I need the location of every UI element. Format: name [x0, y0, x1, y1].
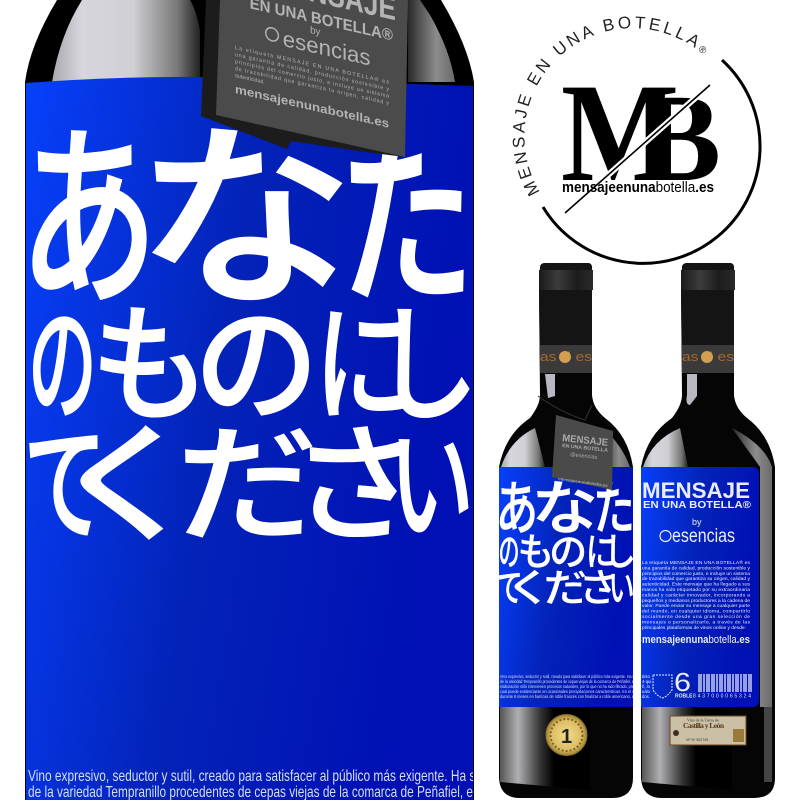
front label slogan: く — [506, 568, 552, 611]
front bottle — [496, 263, 636, 798]
back label title: EN UNA BOTELLA® — [643, 499, 751, 511]
large label slogan: の — [194, 295, 319, 438]
back label paragraph: pequeños y medianos productores a la cadena de — [642, 598, 750, 604]
large label slogan: い — [389, 415, 474, 558]
front bottle body — [499, 263, 633, 798]
front label slogan: の — [549, 532, 587, 575]
front bottle highlights — [500, 374, 630, 790]
back label paragraph: manos ha sido etiquetado por su extraordinaria — [642, 587, 750, 593]
back label paragraph: principales plataformas de vinos online y desde: — [642, 625, 746, 631]
front label small print: Vino expresivo, seductor y sutil, creado para satisfacer al público más exigente. Ha si — [500, 674, 635, 680]
large hang tag: una garantía de calidad, producción sostenible y — [235, 52, 389, 93]
front label slogan: に — [586, 532, 616, 575]
back label paragraph: La etiqueta MENSAJE EN UNA BOTELLA® es — [642, 559, 751, 566]
large label slogan: て — [23, 415, 107, 558]
barcode — [693, 674, 751, 700]
back label paragraph: valor. Puede enviar su mensaje a cualquier parte — [642, 603, 750, 609]
barcode: 8437000065324 — [693, 694, 751, 700]
back label title: MENSAJE — [642, 478, 750, 503]
back label left print: tinto — [642, 674, 651, 679]
large bottle glass — [25, 0, 474, 800]
front blue label — [499, 467, 633, 707]
large label small print — [28, 768, 478, 800]
logo website: mensajeenunabotella.es — [562, 179, 714, 196]
large hang tag — [201, 0, 408, 157]
logo monogram: M — [561, 55, 679, 211]
large label slogan: だ — [176, 415, 318, 558]
Castilla y León sticker — [670, 716, 746, 745]
back label left print — [642, 674, 651, 699]
large label slogan: く — [52, 415, 202, 558]
front bottle hang tag: MENSAJE — [562, 433, 609, 449]
Castilla y León sticker: Castilla y León — [683, 721, 725, 730]
back label paragraph: mensajes o personalizarlo, a través de las — [642, 619, 751, 625]
large hang tag: principios del comercio justo, e incluye un sistema — [235, 59, 389, 100]
oak aging number — [675, 672, 692, 698]
back label left print: uálo — [642, 689, 651, 694]
back label content — [642, 478, 751, 700]
back label paragraph: de trazabilidad que garantiza su origen, calidad y — [642, 576, 751, 582]
large label slogan: も — [90, 295, 210, 438]
front bottle capsule: as Ⅲ es — [540, 349, 593, 364]
large bottle close-up — [19, 0, 479, 800]
back label paragraph: calidad y carácter innovador, incorporando a — [642, 592, 750, 598]
back label left print: ñ, lo — [642, 684, 651, 689]
front label slogan: し — [604, 532, 636, 575]
back label paragraph: principios del comercio justo, e incluye un sistema — [642, 571, 750, 577]
icon: gold medal: 1 — [561, 726, 572, 748]
large hang tag: by — [310, 25, 320, 38]
large hang tag: autenticidad. — [235, 73, 265, 86]
front label slogan: た — [593, 475, 635, 542]
back label paragraph — [642, 559, 751, 631]
front label slogan: だ — [544, 568, 587, 611]
large hang tag: La etiqueta MENSAJE EN UNA BOTELLA® es — [235, 44, 389, 86]
large label slogan: に — [314, 295, 414, 438]
front label slogan: さ — [579, 568, 618, 611]
front label slogan: も — [517, 532, 554, 575]
front label slogan: な — [531, 475, 598, 542]
large label small print: Vino expresivo, seductor y sutil, creado para satisfacer al público más exigente. Ha si — [28, 768, 478, 785]
back label title — [644, 482, 751, 508]
back label esencias logo — [659, 528, 734, 542]
front bottle hang tag: mensajeenunabotella.es — [558, 476, 609, 488]
back bottle capsule — [681, 263, 735, 373]
front bottle hang tag: @esencias — [570, 452, 598, 461]
back bottle capsule: as Ⅲ es — [682, 349, 735, 364]
large blue label — [26, 77, 473, 800]
logo monogram: B — [640, 70, 721, 208]
front label slogan: い — [609, 568, 635, 611]
front label small print: cual puede evidenciarse en ocasionales precipitaciones características. En el c — [500, 689, 634, 695]
front label small print — [500, 674, 635, 700]
large label slogan: し — [374, 295, 479, 438]
Castilla y León sticker: Vino de la Tierra de — [687, 718, 719, 722]
large hang tag: de trazabilidad que garantiza tu origen, calidad y — [235, 66, 389, 107]
logo ring — [543, 60, 760, 263]
large label slogan: の — [28, 295, 97, 438]
back bottle body — [641, 263, 775, 798]
front label slogan: あ — [496, 475, 538, 542]
logo: Mensaje en una botella — [512, 16, 762, 265]
front label slogan: て — [497, 568, 523, 611]
back label paragraph: socialmente desde una gran selección de — [642, 614, 750, 620]
large hang tag: mensajeenunabotella.es — [235, 82, 389, 131]
large label slogan: さ — [291, 415, 419, 558]
logo curved text: MENSAJE EN UNA BOTELLA® — [512, 16, 706, 196]
oak aging number: ROBLE — [675, 694, 693, 700]
front label small print: elaboración sólo intervienen procesos naturales, por lo que no ha sido filtrado, pre — [500, 684, 634, 690]
front label small print: durante 6 meses en barricas de roble francés con finalizar a roble americano, a — [500, 694, 634, 700]
icon: gold medal — [546, 714, 587, 756]
back label paragraph: del mundo, en cualquier idioma, compartirlo — [642, 609, 750, 615]
back blue label — [641, 467, 759, 707]
front bottle hang tag — [538, 396, 613, 490]
front label small print: de la variedad Tempranillo procedentes de cepas viejas de la comarca de Peñafiel, e — [500, 679, 634, 685]
back label by: by — [692, 517, 702, 527]
large label slogan: た — [338, 111, 475, 330]
Castilla y León sticker: VP Nº 503745 — [686, 738, 708, 742]
back label left print: dos. — [642, 694, 650, 699]
front label slogan — [499, 481, 633, 604]
back bottle highlights — [642, 374, 772, 790]
back label paragraph: autenticidad. Este mensaje que ha llegado a sus — [642, 582, 751, 588]
icon: shield — [653, 675, 672, 698]
large hang tag: esencias — [283, 26, 371, 71]
back label website: mensajeenunabotella.es — [642, 634, 750, 646]
back bottle — [641, 263, 775, 798]
back label esencias logo: esencias — [672, 526, 735, 547]
back label paragraph: una garantía de calidad, producción sostenible y — [642, 565, 751, 571]
large label slogan: な — [136, 111, 354, 330]
front bottle capsule — [539, 263, 593, 373]
large label slogan — [29, 128, 470, 540]
oak aging number: 6 — [674, 667, 691, 697]
front label slogan: の — [499, 532, 520, 575]
large label slogan: あ — [19, 111, 158, 330]
front bottle hang tag: EN UNA BOTELLA — [562, 443, 609, 454]
back label left print: 4-qui — [642, 679, 651, 684]
